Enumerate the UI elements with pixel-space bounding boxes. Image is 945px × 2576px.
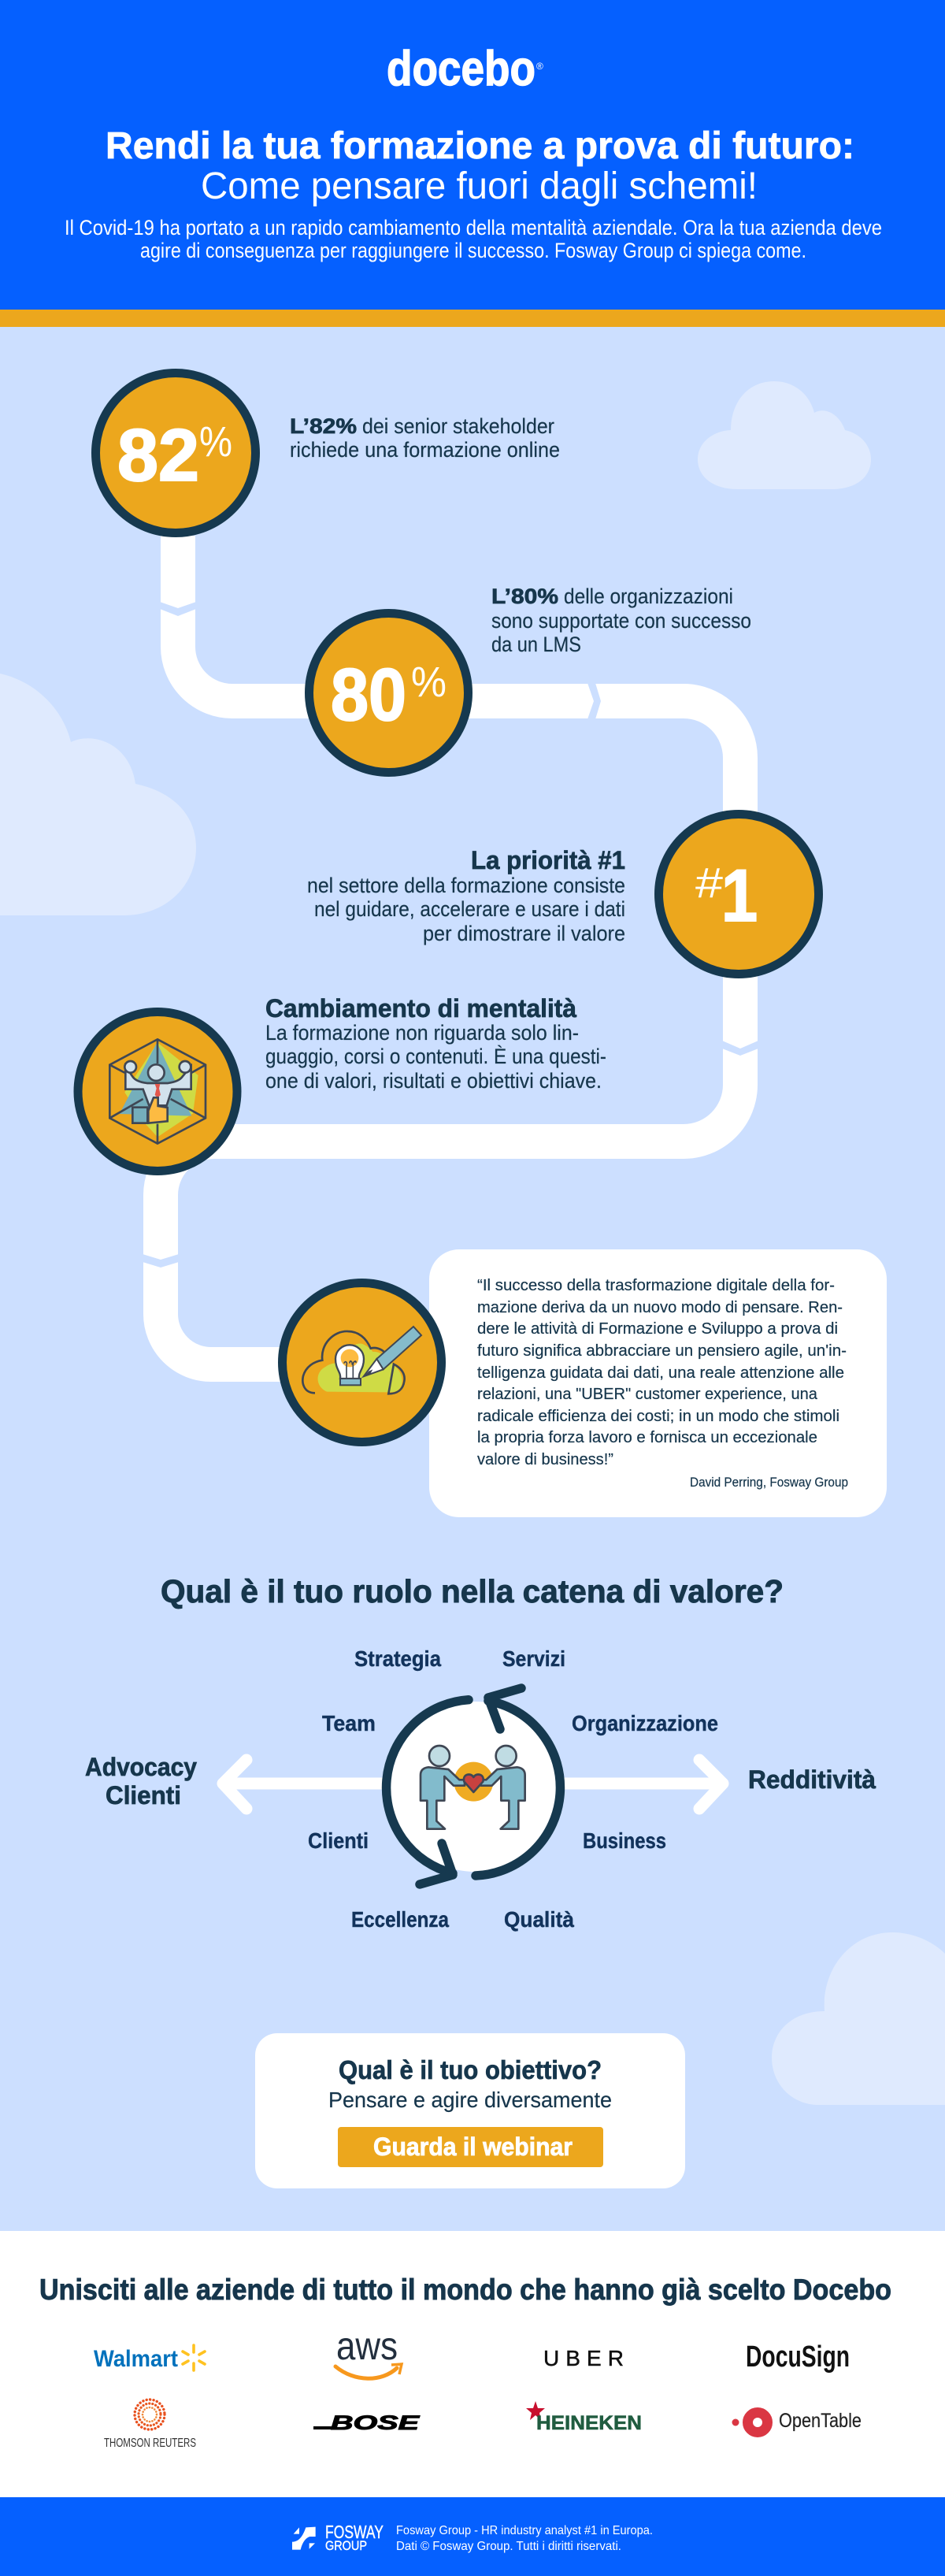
text mindset: guaggio, corsi o contenuti. È una questi- (265, 1045, 606, 1068)
logo: Fosway Group (292, 2522, 384, 2553)
quote text: dere le attività di Formazione e Sviluppo a prova di (477, 1320, 838, 1338)
text 82%: dei senior stakeholder (362, 414, 554, 438)
panel: quote (282, 1249, 887, 1517)
text 80% (491, 585, 751, 656)
text 82%: richiede una formazione online (290, 438, 560, 462)
label: Strategia: Strategia (354, 1646, 441, 1671)
stat 80% (309, 585, 751, 772)
logo: Heineken: HEINEKEN (536, 2412, 642, 2434)
logo: Heineken (526, 2401, 642, 2434)
winding white path (143, 536, 758, 1364)
label: Qualità: Qualità (504, 1907, 574, 1932)
icon: strong businessman in hexagon (109, 1039, 206, 1144)
label: Business: Business (583, 1828, 666, 1853)
stat #1 (307, 815, 819, 974)
quote text: telligenza guidata dai dati, una reale attenzione alle (477, 1364, 844, 1382)
text 80%: da un LMS (491, 633, 581, 656)
page background (0, 327, 945, 2231)
customers background (0, 2231, 945, 2497)
cloud: top right (698, 381, 871, 489)
number 82%: % (199, 418, 232, 466)
text mindset: La formazione non riguarda solo lin- (265, 1021, 579, 1045)
panel: call to action (255, 2033, 685, 2188)
text 80%: delle organizzazioni (564, 585, 733, 608)
number 80%: 80 (331, 653, 406, 736)
label: Redditività: Redditività (748, 1765, 876, 1794)
cta subheading: Pensare e agire diversamente (328, 2088, 612, 2112)
panel: customers (0, 2231, 945, 2497)
quote text (477, 1276, 847, 1468)
header background (0, 0, 945, 310)
number 82%: 82 (117, 414, 199, 496)
logo: DocuSign: DocuSign (746, 2340, 850, 2374)
logo: Fosway Group: GROUP (325, 2538, 367, 2553)
quote text: relazioni, una "UBER" customer experience, una (477, 1385, 818, 1403)
icon: two people and heart (421, 1746, 525, 1829)
logo: OpenTable (732, 2410, 862, 2433)
number #1: 1 (721, 854, 758, 937)
step: cambiamento di mentalità (78, 994, 606, 1171)
text mindset: Cambiamento di mentalità (265, 994, 576, 1023)
badge idea (282, 1282, 441, 1442)
quote text: valore di business!” (477, 1450, 613, 1468)
cta heading: Qual è il tuo obiettivo? (339, 2055, 602, 2084)
logo: Thomson Reuters: THOMSON REUTERS (104, 2437, 196, 2450)
footer text: Dati © Fosway Group. Tutti i diritti riservati. (396, 2540, 621, 2553)
text #1: per dimostrare il valore (423, 922, 625, 945)
cloud: bottom right (772, 1932, 945, 2105)
label: Eccellenza: Eccellenza (351, 1907, 449, 1932)
label: Organizzazione: Organizzazione (572, 1711, 718, 1735)
label: Advocacy Clienti: Clienti (106, 1781, 181, 1810)
logo: Walmart: Walmart (94, 2346, 178, 2372)
badge 82% (96, 373, 255, 533)
logo: Bose: BOSE (331, 2412, 421, 2434)
heading: value chain: Qual è il tuo ruolo nella catena di valore? (161, 1573, 784, 1609)
footer text (396, 2524, 653, 2553)
quote text: “Il successo della trasformazione digitale della for- (477, 1276, 835, 1294)
quote attribution: David Perring, Fosway Group (690, 1475, 848, 1490)
diagram: value chain (85, 1646, 876, 1932)
logo: Uber: UBER (543, 2346, 624, 2370)
title: Come pensare fuori dagli schemi! (201, 165, 758, 207)
cloud: left (0, 674, 196, 915)
text #1: nel settore della formazione consiste (307, 874, 625, 897)
text 82% (290, 414, 560, 462)
cycle circle (387, 1688, 560, 1884)
logo: Fosway Group: FOSWAY (325, 2522, 384, 2542)
text #1: La priorità #1 (471, 846, 625, 874)
label: Servizi: Servizi (502, 1646, 565, 1671)
text #1: nel guidare, accelerare e usare i dati (314, 897, 625, 921)
cta card (255, 2033, 685, 2188)
intro text (65, 216, 882, 262)
arrow: right (563, 1760, 723, 1809)
label: Team: Team (322, 1711, 376, 1735)
quote text: mazione deriva da un nuovo modo di pensare. Ren- (477, 1298, 843, 1316)
quote text: la propria forza lavoro e fornisca un eccezionale (477, 1428, 817, 1446)
title: Rendi la tua formazione a prova di futuro: (106, 125, 854, 167)
number #1 (695, 854, 758, 937)
cta button: Guarda il webinar (373, 2132, 573, 2161)
text #1 (307, 846, 625, 945)
cta button (338, 2127, 603, 2167)
text 82%: L’82% (290, 414, 357, 438)
badge 80% (309, 613, 468, 772)
quote text: futuro significa abbracciare un pensiero agile, un'in- (477, 1342, 847, 1360)
logo: docebo: docebo (387, 42, 536, 96)
footer (0, 2497, 945, 2576)
accent bar (0, 310, 945, 327)
number #1: # (695, 859, 723, 907)
text 80%: L’80% (491, 585, 558, 608)
logo: aws: aws (336, 2324, 398, 2368)
customers heading: Unisciti alle aziende di tutto il mondo che hanno già scelto Docebo (39, 2273, 891, 2306)
quote text: radicale efficienza dei costi; in un modo che stimoli (477, 1407, 839, 1425)
title (106, 125, 854, 207)
footer text: Fosway Group - HR industry analyst #1 in Europa. (396, 2524, 653, 2537)
arrow: left (223, 1760, 386, 1809)
number 80%: % (411, 659, 447, 706)
text mindset (265, 994, 606, 1093)
logo: Bose (313, 2412, 421, 2434)
quote card (429, 1249, 887, 1517)
header panel (0, 0, 945, 327)
badge #1 (658, 815, 819, 974)
text mindset: one di valori, risultati e obiettivi chiave. (265, 1069, 602, 1093)
logo: OpenTable: OpenTable (779, 2410, 862, 2432)
text 80%: sono supportate con successo (491, 609, 751, 633)
icon: bulb in cloud with pencil (302, 1327, 421, 1394)
stat 82% (96, 373, 560, 533)
badge mindset (78, 1011, 237, 1171)
logo: docebo: ® (536, 61, 543, 72)
label: Clienti: Clienti (308, 1828, 369, 1853)
intro text: agire di conseguenza per raggiungere il successo. Fosway Group ci spiega come. (140, 239, 806, 262)
footer background (0, 2497, 945, 2576)
label: Advocacy Clienti (85, 1753, 197, 1810)
logo: Thomson Reuters (104, 2400, 196, 2450)
label: Advocacy Clienti: Advocacy (85, 1753, 197, 1781)
